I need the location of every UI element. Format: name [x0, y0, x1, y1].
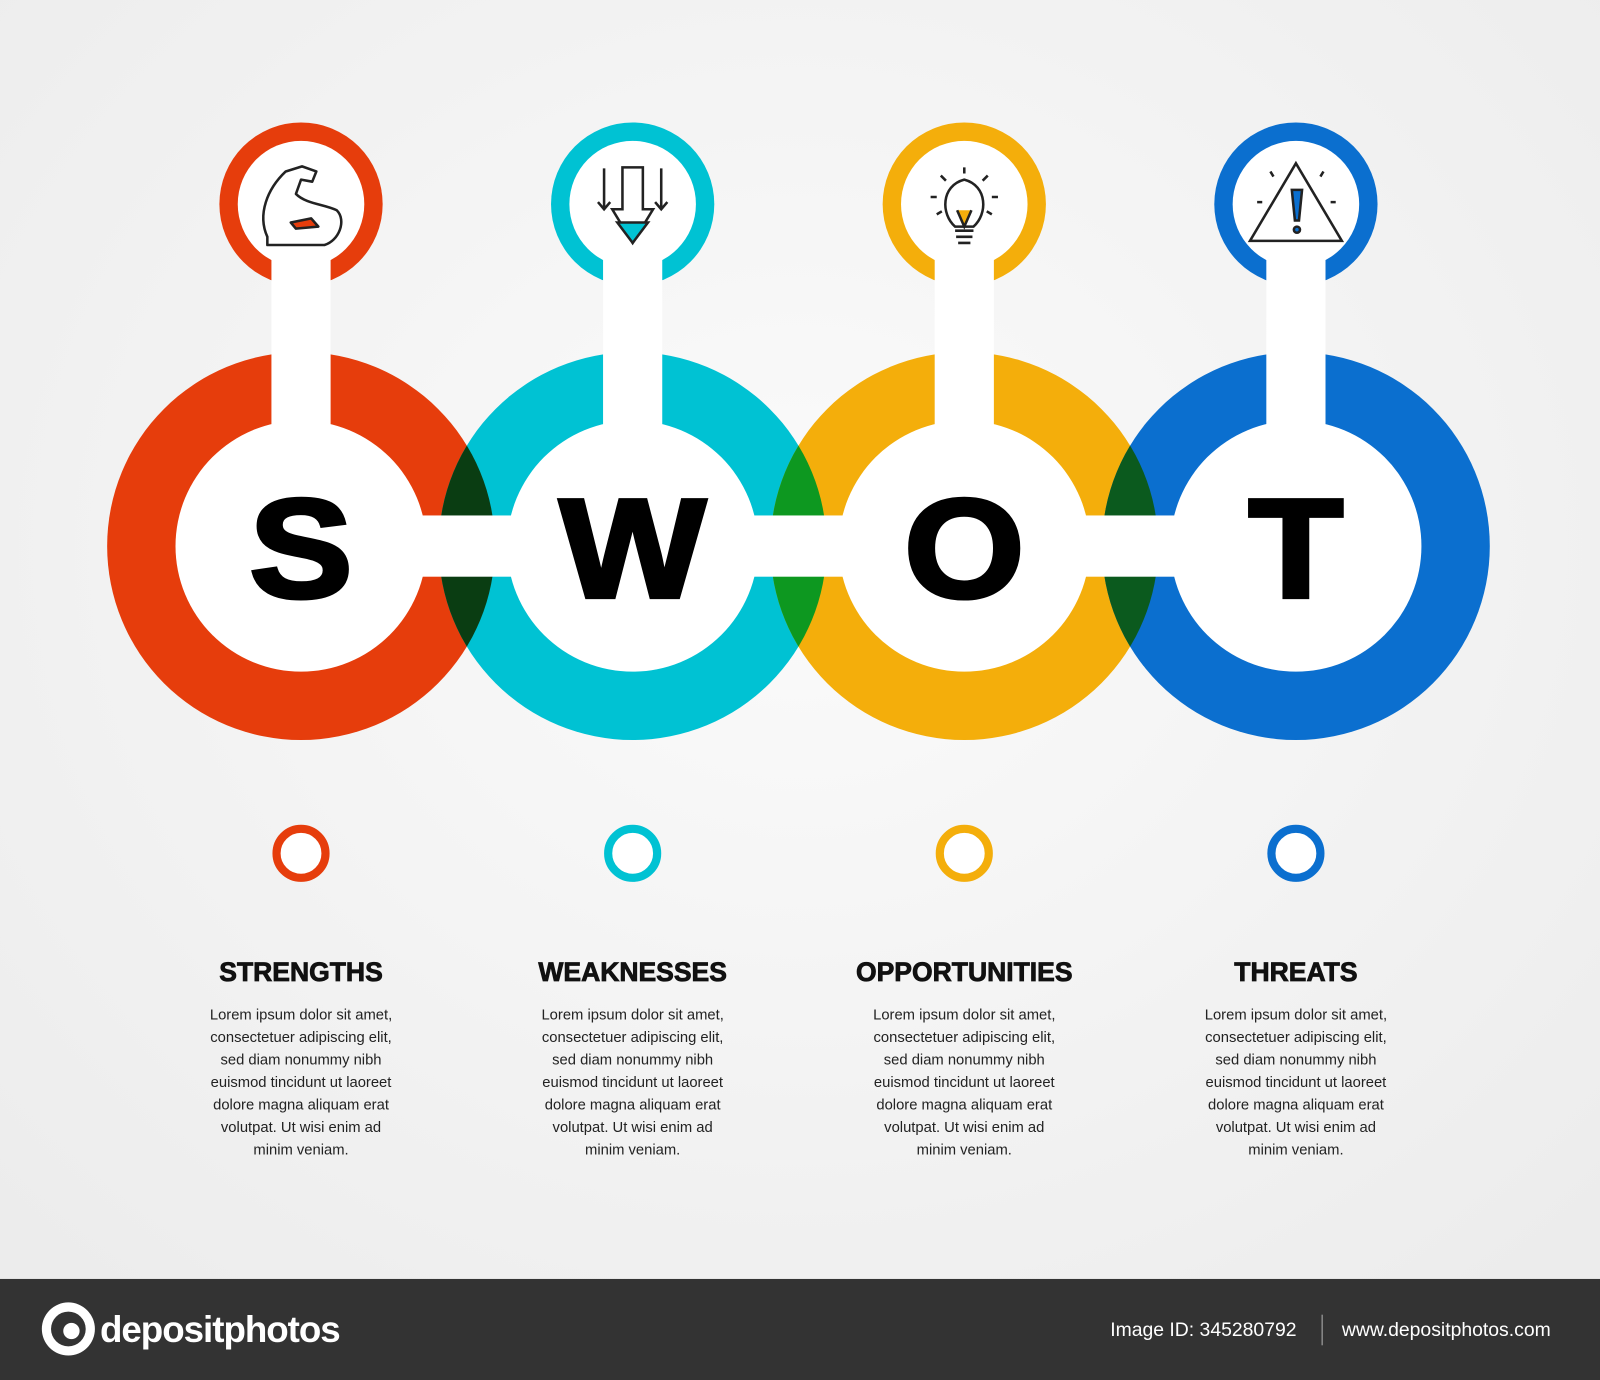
icon: warning: [1250, 163, 1342, 241]
footer bar: [0, 1279, 1600, 1380]
body texts: minim veniam.: [253, 1142, 349, 1158]
titles: THREATS: [1234, 957, 1358, 987]
body texts: dolore magna aliquam erat: [213, 1098, 389, 1114]
letters: O: [904, 471, 1025, 628]
body texts: sed diam nonummy nibh: [221, 1053, 382, 1069]
icon: arm: [263, 166, 341, 245]
body texts: minim veniam.: [1248, 1142, 1344, 1158]
body texts: dolore magna aliquam erat: [1208, 1098, 1384, 1114]
body texts: volutpat. Ut wisi enim ad: [553, 1120, 713, 1136]
body texts: sed diam nonummy nibh: [884, 1053, 1045, 1069]
body texts: consectetuer adipiscing elit,: [210, 1030, 392, 1046]
body texts: minim veniam.: [585, 1142, 680, 1158]
footer bar: depositphotos: [100, 1309, 340, 1350]
body texts: dolore magna aliquam erat: [876, 1098, 1052, 1114]
body texts: volutpat. Ut wisi enim ad: [1216, 1120, 1376, 1136]
white connectors: [176, 141, 1421, 672]
body texts: euismod tincidunt ut laoreet: [542, 1075, 723, 1091]
letters: W: [560, 471, 706, 628]
letters: [249, 471, 1343, 628]
body texts: consectetuer adipiscing elit,: [1205, 1030, 1387, 1046]
body texts: euismod tincidunt ut laoreet: [211, 1075, 391, 1091]
body texts: euismod tincidunt ut laoreet: [1206, 1075, 1386, 1091]
body texts: sed diam nonummy nibh: [1215, 1053, 1376, 1069]
small rings: [277, 829, 1320, 878]
body texts: consectetuer adipiscing elit,: [874, 1030, 1055, 1046]
body texts: Lorem ipsum dolor sit amet,: [1205, 1008, 1387, 1024]
body texts: consectetuer adipiscing elit,: [542, 1030, 723, 1046]
titles: OPPORTUNITIES: [856, 957, 1073, 987]
body texts: volutpat. Ut wisi enim ad: [884, 1120, 1044, 1136]
icon: bulb: [931, 167, 998, 243]
footer bar: www.depositphotos.com: [1341, 1319, 1551, 1341]
body texts: euismod tincidunt ut laoreet: [874, 1075, 1055, 1091]
body texts: dolore magna aliquam erat: [545, 1098, 721, 1114]
body texts: sed diam nonummy nibh: [552, 1053, 713, 1069]
titles: STRENGTHS: [219, 957, 383, 987]
titles: [219, 957, 1358, 987]
body texts: minim veniam.: [917, 1142, 1012, 1158]
titles: WEAKNESSES: [538, 957, 727, 987]
letters: T: [1249, 471, 1343, 628]
body texts: Lorem ipsum dolor sit amet,: [541, 1008, 724, 1024]
body texts: Lorem ipsum dolor sit amet,: [210, 1008, 392, 1024]
letters: S: [249, 471, 353, 628]
footer bar: Image ID: 345280792: [1110, 1319, 1297, 1341]
body texts: volutpat. Ut wisi enim ad: [221, 1120, 381, 1136]
body texts: [210, 1008, 1387, 1158]
body texts: Lorem ipsum dolor sit amet,: [873, 1008, 1055, 1024]
big circles: [107, 352, 1490, 740]
top icon circles: [219, 122, 1378, 286]
icon: down arrow: [598, 167, 667, 243]
